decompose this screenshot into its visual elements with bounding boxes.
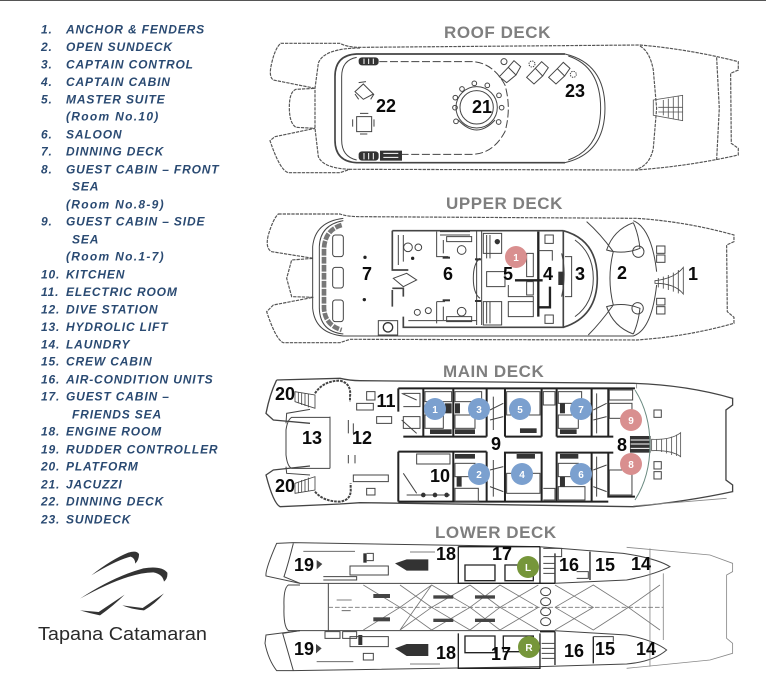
- legend list: SALOON: [66, 128, 122, 142]
- labels: lower deck numbers: 19: [294, 555, 314, 575]
- table: [378, 321, 398, 335]
- legend list: 2.: [40, 40, 53, 54]
- legend list: (Room No.8-9): [66, 198, 165, 212]
- room markers: main deck: 4: [519, 470, 525, 481]
- legend list: FRIENDS SEA: [72, 408, 162, 422]
- legend list: LAUNDRY: [66, 338, 131, 352]
- legend list: JACUZZI: [66, 478, 123, 492]
- master suite walls: [483, 232, 572, 325]
- labels: main deck numbers: 8: [617, 435, 627, 455]
- legend list: 12.: [41, 302, 60, 316]
- labels: main deck numbers: 20: [275, 476, 295, 496]
- room markers: main deck: 9: [628, 416, 634, 427]
- labels: lower deck numbers: [294, 544, 656, 664]
- room markers: main deck: 6: [578, 470, 584, 481]
- legend list: RUDDER CONTROLLER: [66, 442, 218, 456]
- legend list: ELECTRIC ROOM: [66, 285, 178, 299]
- legend list: 5.: [41, 92, 53, 106]
- logo: Tapana Catamaran: Tapana Catamaran: [38, 624, 207, 644]
- room markers: main deck: 2: [476, 470, 482, 481]
- legend list: (Room No.1-7): [66, 250, 165, 264]
- legend list: ENGINE ROOM: [66, 424, 162, 438]
- plan: upper deck: [267, 214, 734, 343]
- labels: upper deck numbers: [362, 263, 698, 284]
- labels: lower deck numbers: 19: [294, 639, 314, 659]
- legend list: KITCHEN: [66, 268, 125, 282]
- labels: lower deck numbers: 15: [595, 639, 615, 659]
- legend list: 14.: [41, 338, 60, 352]
- labels: lower deck numbers: 18: [436, 544, 456, 564]
- labels: lower deck numbers: 17: [492, 544, 512, 564]
- labels: upper deck numbers: 3: [575, 264, 585, 284]
- labels: upper deck numbers: 5: [503, 264, 513, 284]
- legend list: GUEST CABIN – SIDE: [66, 214, 205, 228]
- guest cabin walls: [458, 547, 593, 668]
- legend list: DIVE STATION: [66, 302, 158, 316]
- legend list: CREW CABIN: [66, 354, 152, 368]
- legend list: 1.: [41, 22, 53, 36]
- curved stern bench: [324, 225, 342, 330]
- dive station fittings: [348, 392, 392, 495]
- room markers: main deck: [424, 398, 642, 485]
- legend list: [40, 22, 220, 526]
- legend list: CAPTAIN CONTROL: [66, 58, 194, 72]
- labels: main deck numbers: 12: [352, 428, 372, 448]
- room markers: main deck: 1: [432, 405, 438, 416]
- legend list: 4.: [40, 75, 53, 89]
- legend list: OPEN SUNDECK: [66, 40, 173, 54]
- room markers: main deck: 5: [517, 405, 523, 416]
- legend list: 11.: [41, 285, 59, 299]
- label: 21: 21: [472, 97, 492, 117]
- cabin beds: [402, 390, 633, 502]
- legend list: 13.: [41, 320, 60, 334]
- tables: [353, 82, 374, 134]
- heading: lower deck: LOWER DECK: [435, 523, 557, 542]
- anchor net: [655, 267, 683, 294]
- legend list: GUEST CABIN – FRONT: [66, 162, 220, 176]
- legend list: CAPTAIN CABIN: [66, 75, 171, 89]
- saloon walls: [392, 231, 563, 327]
- labels: lower deck numbers: 16: [559, 555, 579, 575]
- labels: upper deck numbers: 7: [362, 264, 372, 284]
- labels: upper deck numbers: 1: [688, 264, 698, 284]
- legend list: 7.: [41, 144, 53, 158]
- legend list: 8.: [41, 162, 53, 176]
- logo: Tapana Catamaran: [38, 552, 207, 644]
- room markers: main deck: 3: [476, 405, 482, 416]
- legend list: DINNING DECK: [66, 494, 165, 508]
- legend list: MASTER SUITE: [66, 92, 166, 106]
- legend list: GUEST CABIN –: [66, 390, 170, 404]
- plan: main deck: [266, 378, 733, 507]
- plan: roof deck: [270, 43, 738, 173]
- dining seats: [333, 235, 343, 322]
- room marker: R: [518, 636, 540, 658]
- legend list: 17.: [41, 390, 60, 404]
- legend list: 3.: [41, 58, 53, 72]
- legend list: 19.: [41, 442, 60, 456]
- labels: main deck numbers: 9: [491, 434, 501, 454]
- cabin walls: [398, 388, 635, 502]
- davit racks: [359, 57, 402, 161]
- label: 22: 22: [376, 96, 396, 116]
- labels: lower deck numbers: 14: [631, 554, 651, 574]
- legend list: 23.: [40, 512, 60, 526]
- heading: roof deck: ROOF DECK: [444, 23, 551, 42]
- legend list: SEA: [72, 180, 99, 194]
- legend list: 22.: [40, 494, 60, 508]
- legend list: (Room No.10): [66, 110, 160, 124]
- legend list: AIR-CONDITION UNITS: [65, 372, 213, 386]
- legend list: 9.: [41, 214, 53, 228]
- legend list: DINNING DECK: [66, 144, 165, 158]
- lattice: [363, 585, 660, 630]
- small stencil labels: [303, 551, 440, 664]
- legend list: 15.: [41, 354, 60, 368]
- room marker: L: L: [525, 563, 531, 574]
- plan: lower deck: [265, 543, 733, 671]
- legend list: SUNDECK: [66, 512, 132, 526]
- sundeck fixtures: [632, 246, 665, 314]
- room marker: L: [517, 556, 539, 578]
- legend list: 21.: [40, 478, 60, 492]
- legend list: ANCHOR & FENDERS: [65, 22, 205, 36]
- stern bays: [286, 409, 330, 475]
- room markers: main deck: 8: [628, 460, 634, 471]
- labels: main deck numbers: 10: [430, 466, 450, 486]
- labels: upper deck numbers: 2: [617, 263, 627, 283]
- room marker: 1 pink: [505, 246, 527, 268]
- legend list: 10.: [41, 268, 60, 282]
- labels: main deck numbers: 13: [302, 428, 322, 448]
- bow curve and net: [635, 390, 650, 500]
- anchor net: [653, 95, 683, 121]
- labels: lower deck numbers: 18: [436, 643, 456, 663]
- labels: main deck numbers: [275, 384, 627, 496]
- labels: lower deck numbers: 15: [595, 555, 615, 575]
- engines: [358, 553, 428, 656]
- room marker: 1 pink: 1: [513, 253, 519, 264]
- legend list: 18.: [41, 424, 60, 438]
- legend list: 20.: [40, 460, 60, 474]
- label: 23: 23: [565, 81, 585, 101]
- legend list: PLATFORM: [66, 460, 139, 474]
- labels: upper deck numbers: 4: [543, 264, 553, 284]
- legend list: SEA: [72, 232, 99, 246]
- labels: main deck numbers: 20: [275, 384, 295, 404]
- legend list: 16.: [41, 372, 60, 386]
- labels: lower deck numbers: 17: [491, 644, 511, 664]
- room markers: main deck: 7: [578, 405, 584, 416]
- legend list: 6.: [41, 128, 53, 142]
- jacuzzi: [453, 81, 504, 130]
- heading: upper deck: UPPER DECK: [446, 194, 563, 213]
- labels: lower deck numbers: 14: [636, 639, 656, 659]
- labels: lower deck numbers: 16: [564, 641, 584, 661]
- heading: main deck: MAIN DECK: [443, 362, 544, 381]
- labels: upper deck numbers: 6: [443, 264, 453, 284]
- lift bay: [284, 577, 357, 631]
- loungers: [499, 59, 576, 84]
- room marker: R: R: [525, 643, 533, 654]
- legend list: HYDROLIC LIFT: [66, 320, 169, 334]
- labels: main deck numbers: 11: [376, 391, 396, 411]
